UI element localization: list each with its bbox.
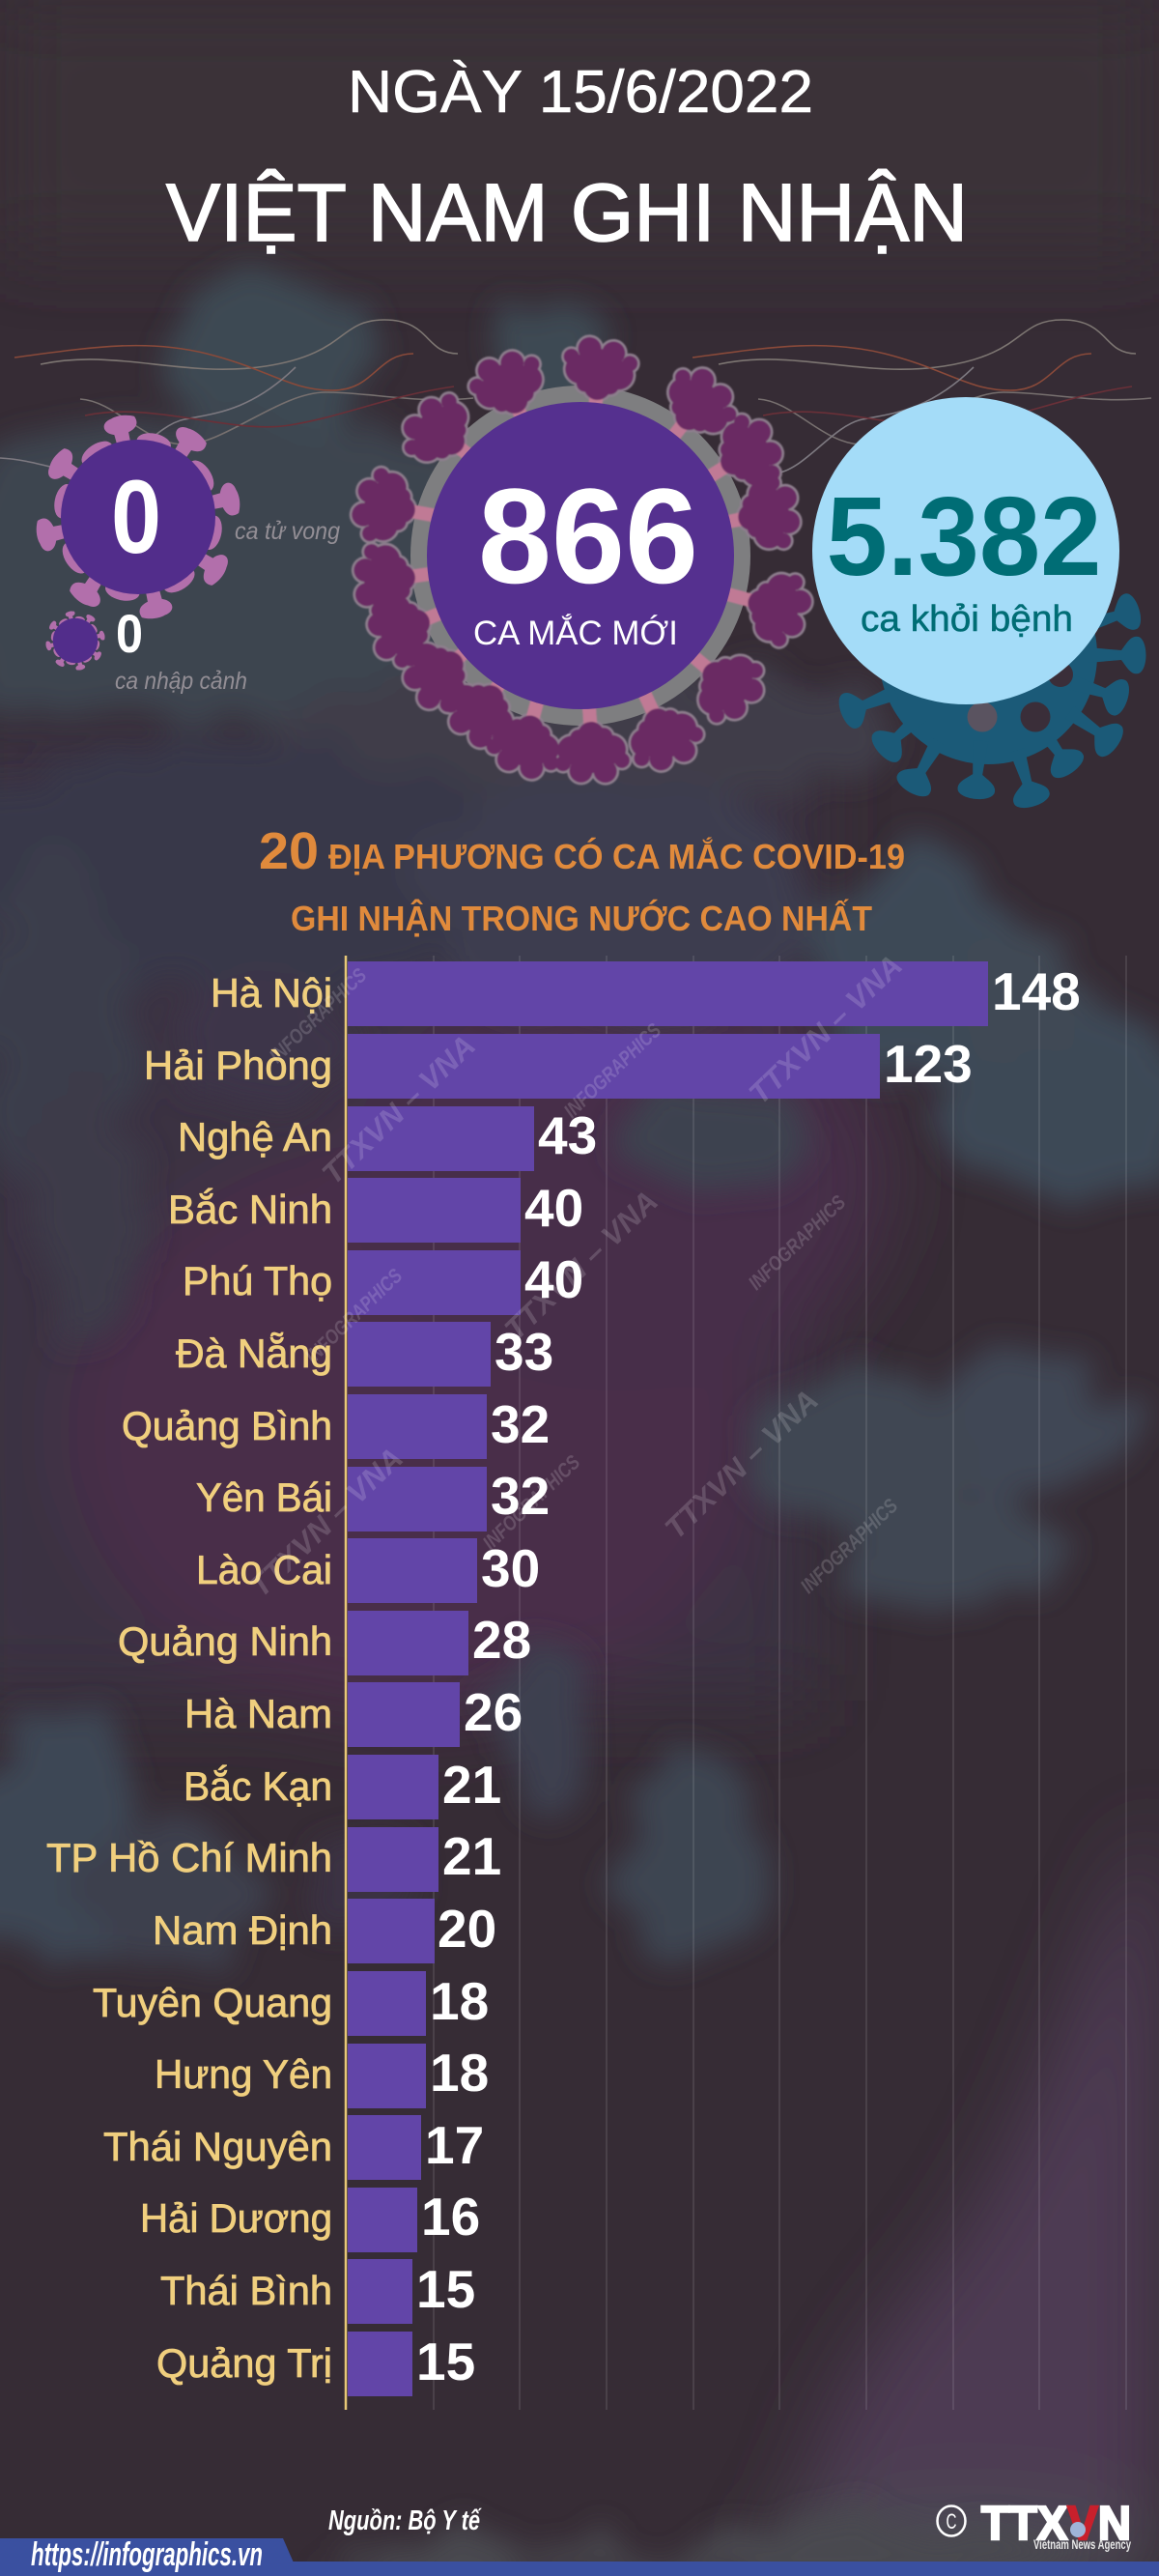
- logo TTXVN: TTXVN: [981, 2498, 1131, 2550]
- bar chart: 21: [442, 1826, 501, 1886]
- stat: deaths: 0: [111, 458, 161, 575]
- bar chart: 17: [425, 2115, 484, 2175]
- stat: imported: 0: [116, 603, 143, 664]
- title main: VIỆT NAM GHI NHẬN: [166, 167, 968, 258]
- bar chart: [46, 956, 1126, 2410]
- chart heading: [259, 822, 905, 938]
- bar chart: 32: [491, 1394, 550, 1454]
- bar chart: 21: [442, 1755, 501, 1815]
- watermarks: INFOGRAPHICS: [745, 1191, 850, 1295]
- watermarks: [242, 948, 909, 1604]
- bar chart: Nam Định: [153, 1907, 332, 1953]
- footer band: [0, 2536, 1159, 2576]
- chart heading: GHI NHẬN TRONG NƯỚC CAO NHẤT: [291, 898, 872, 938]
- watermarks: TTXVN – VNA: [742, 948, 909, 1111]
- stat: deaths: [34, 413, 340, 621]
- stat: new cases: CA MẮC MỚI: [473, 614, 678, 652]
- stat: imported: [45, 603, 247, 695]
- bar chart: 16: [421, 2187, 480, 2247]
- watermarks: TTXVN – VNA: [658, 1383, 825, 1546]
- bar chart: 18: [430, 2043, 489, 2103]
- bar chart: 26: [464, 1682, 523, 1742]
- watermarks: TTXVN – VNA: [497, 1184, 664, 1347]
- bar chart: 32: [491, 1466, 550, 1526]
- watermarks: TTXVN – VNA: [315, 1028, 482, 1191]
- watermarks: INFOGRAPHICS: [479, 1451, 584, 1555]
- watermarks: INFOGRAPHICS: [266, 964, 371, 1068]
- bar chart: Yên Bái: [196, 1474, 332, 1520]
- bar chart: Tuyên Quang: [93, 1980, 332, 2025]
- source: Nguồn: Bộ Y tế: [328, 2505, 482, 2536]
- watermarks: TTXVN – VNA: [242, 1441, 410, 1604]
- bar chart: Hải Dương: [140, 2195, 332, 2241]
- bar chart: Bắc Kạn: [184, 1763, 332, 1809]
- bar chart: Bắc Ninh: [168, 1187, 332, 1232]
- stat: new cases: [427, 402, 734, 709]
- watermarks: INFOGRAPHICS: [301, 1265, 407, 1368]
- bar chart: 43: [538, 1105, 597, 1165]
- icon: teal virus: [834, 546, 1145, 812]
- bar chart: 148: [992, 961, 1081, 1021]
- bar chart: 20: [438, 1899, 496, 1959]
- title date: NGÀY 15/6/2022: [348, 59, 813, 126]
- icon: large virus: [348, 334, 818, 787]
- bar chart: 15: [416, 2332, 475, 2391]
- bar chart: Hà Nam: [184, 1691, 332, 1736]
- stat: recovered: ca khỏi bệnh: [861, 599, 1073, 640]
- logo TTXVN: C: [947, 2509, 957, 2533]
- bar chart: Hải Phòng: [144, 1043, 332, 1088]
- bar chart: 33: [495, 1322, 553, 1382]
- bar chart: Thái Bình: [160, 2268, 332, 2313]
- bar chart: Thái Nguyên: [103, 2124, 332, 2169]
- bar chart: 40: [524, 1178, 583, 1238]
- stat: deaths: ca tử vong: [235, 518, 340, 545]
- bar chart: 40: [524, 1249, 583, 1309]
- wavy lines decoration: [0, 320, 1151, 473]
- bar chart: 123: [884, 1034, 973, 1094]
- bar chart: 15: [416, 2259, 475, 2319]
- bar chart: 30: [481, 1538, 540, 1598]
- bar chart: TP Hồ Chí Minh: [46, 1835, 332, 1880]
- chart heading: ĐỊA PHƯƠNG CÓ CA MẮC COVID-19: [328, 836, 905, 876]
- watermarks: INFOGRAPHICS: [560, 1019, 665, 1123]
- bar chart: Nghệ An: [178, 1114, 332, 1159]
- bar chart: Đà Nẵng: [176, 1331, 332, 1376]
- chart heading: 20: [259, 822, 319, 880]
- stat: new cases: 866: [478, 460, 698, 612]
- bar chart: 18: [430, 1971, 489, 2031]
- stat: imported: ca nhập cảnh: [115, 668, 247, 695]
- bar chart: Lào Cai: [196, 1547, 332, 1592]
- bar chart: Hà Nội: [211, 970, 332, 1016]
- bar chart: Quảng Bình: [122, 1403, 332, 1448]
- watermarks: INFOGRAPHICS: [797, 1495, 902, 1598]
- bar chart: Phú Thọ: [183, 1258, 332, 1303]
- stat: recovered: [812, 397, 1119, 704]
- bar chart: Quảng Trị: [156, 2340, 332, 2386]
- bar chart: Quảng Ninh: [118, 1618, 332, 1664]
- bar chart: 28: [472, 1610, 531, 1670]
- footer band: https://infographics.vn: [31, 2536, 263, 2573]
- stat: recovered: 5.382: [827, 473, 1101, 599]
- bar chart: Hưng Yên: [155, 2051, 332, 2097]
